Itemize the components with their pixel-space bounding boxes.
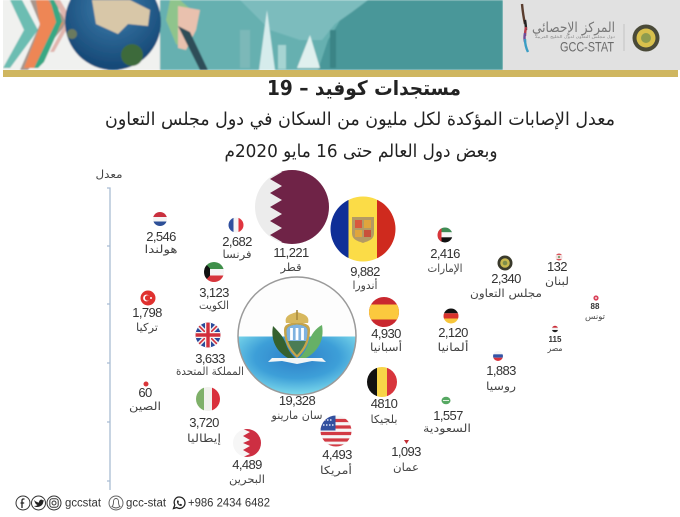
- emblem: crown: [286, 312, 308, 323]
- country: Tunisia: 88: [591, 302, 600, 311]
- flag: Saudi Arabia: [442, 397, 450, 404]
- footer social bar: [16, 496, 270, 510]
- country: UAE: 2,416: [430, 246, 460, 261]
- flag: Turkey: [140, 290, 156, 306]
- country: GCC: [470, 256, 542, 300]
- country: China: الصين: [129, 400, 161, 413]
- country: Egypt: مصر: [547, 344, 562, 353]
- country: Kuwait: 3,123: [199, 285, 229, 300]
- country: San Marino: سان مارينو: [270, 409, 322, 422]
- flag: USA: [320, 415, 352, 447]
- country: Spain: أسبانيا: [370, 340, 402, 354]
- country: UAE: [428, 227, 462, 275]
- country: Russia: 1,883: [486, 363, 516, 378]
- country: United Kingdom: المملكة المتحدة: [176, 365, 244, 378]
- country: Germany: ألمانيا: [438, 340, 468, 354]
- country: Andorra: أندورا: [352, 278, 378, 292]
- country: Qatar: قطر: [279, 261, 302, 274]
- emblem: laurel: [272, 326, 295, 360]
- country: Netherlands: [144, 212, 178, 256]
- country: Egypt: [547, 325, 562, 353]
- country: Oman: [391, 440, 421, 474]
- handle: gcc-stat: gcc-stat: [126, 498, 167, 510]
- flag: China: [144, 382, 148, 386]
- icon: facebook: [16, 496, 30, 510]
- country: Turkey: تركيا: [136, 321, 158, 334]
- country: Saudi Arabia: السعودية: [423, 422, 471, 435]
- country: Germany: [438, 308, 468, 354]
- emblem: shield: [284, 322, 310, 358]
- icon: twitter: [32, 496, 46, 510]
- logo arabic name: المركز الإحصائي: [532, 20, 615, 36]
- country: Bahrain: [229, 429, 265, 486]
- flag: France: [228, 218, 244, 232]
- flag: Qatar: [255, 170, 329, 244]
- country: Kuwait: الكويت: [199, 299, 229, 312]
- country: GCC: 2,340: [491, 271, 521, 286]
- logo panel: [503, 0, 680, 70]
- country: Lebanon: [546, 254, 568, 287]
- country: Andorra: 9,882: [350, 264, 380, 279]
- country: Tunisia: تونس: [585, 312, 605, 321]
- country: China: [129, 382, 161, 413]
- country: Turkey: 1,798: [132, 305, 162, 320]
- country: Italy: 3,720: [189, 415, 219, 430]
- flag: UAE: [438, 228, 452, 242]
- country: UAE: الإمارات: [428, 262, 462, 275]
- country: Spain: 4,930: [371, 326, 401, 341]
- flag: Germany: [444, 308, 458, 324]
- country: San Marino: 19,328: [279, 393, 315, 408]
- country: Oman: 1,093: [391, 444, 421, 459]
- country: United Kingdom: 3,633: [195, 351, 225, 366]
- country: San Marino: [238, 277, 356, 422]
- country: Bahrain: البحرين: [229, 473, 265, 486]
- country: Spain: [369, 297, 402, 354]
- country: Lebanon: 132: [547, 259, 567, 274]
- logo ribbon: [522, 4, 528, 52]
- icon: whatsapp: [174, 497, 185, 508]
- country: Kuwait: [199, 262, 229, 312]
- subtitle line 1: معدل الإصابات المؤكدة لكل مليون من السكان في دول مجلس التعاون: [105, 109, 615, 130]
- scale axis: [96, 168, 123, 490]
- icon: instagram: [47, 496, 61, 510]
- flag: United Kingdom: [195, 322, 221, 348]
- country: Saudi Arabia: 1,557: [433, 408, 463, 423]
- country: Tunisia: [585, 295, 605, 321]
- flag: Netherlands: [153, 212, 167, 226]
- country: France: 2,682: [222, 234, 252, 249]
- axis title: معدل: [96, 168, 123, 181]
- flag: Russia: [493, 351, 503, 361]
- country: Qatar: 11,221: [273, 245, 309, 260]
- banner artwork: [0, 0, 503, 70]
- country: Germany: 2,120: [438, 325, 468, 340]
- flag: Lebanon: [556, 254, 562, 260]
- country: France: فرنسا: [222, 248, 252, 261]
- country: Egypt: 115: [549, 335, 562, 344]
- flag: GCC: [498, 256, 512, 270]
- country: USA: أمريكا: [320, 463, 352, 477]
- country: Saudi Arabia: [423, 397, 471, 435]
- handle: gccstat: gccstat: [65, 498, 102, 510]
- country: Russia: روسيا: [486, 380, 516, 393]
- country: France: [222, 217, 252, 261]
- country: Lebanon: لبنان: [545, 275, 569, 288]
- flag: Spain: [369, 297, 399, 327]
- country: Belgium: 4810: [371, 396, 398, 411]
- title: مستجدات كوفيد – 19: [267, 76, 461, 100]
- country: United Kingdom: [176, 322, 244, 378]
- flag: Oman: [404, 440, 409, 444]
- country: Qatar: [255, 166, 332, 274]
- flag: Andorra: [330, 196, 396, 262]
- country: Oman: عمان: [393, 461, 419, 474]
- country: USA: 4,493: [322, 447, 352, 462]
- country: Belgium: بلجيكا: [370, 413, 398, 426]
- country: Andorra: [330, 196, 396, 292]
- flag: Bahrain: [233, 429, 261, 457]
- header banner: [0, 0, 680, 77]
- phone number: +986 2434 6482: [188, 498, 270, 510]
- flag: Belgium: [367, 367, 397, 397]
- logo arabic subtitle: دول مجلس التعاون لدول الخليج العربية: [535, 34, 615, 39]
- country: Italy: إيطاليا: [187, 432, 221, 445]
- flag: San Marino: [238, 277, 356, 396]
- country: Russia: [486, 350, 516, 393]
- icon: GCC emblem: [632, 24, 660, 52]
- country: USA: [320, 415, 352, 477]
- icon: snapchat: [109, 496, 123, 510]
- country: GCC: مجلس التعاون: [470, 287, 542, 300]
- gold band: [3, 70, 678, 77]
- country: Netherlands: 2,546: [146, 229, 176, 244]
- country: Netherlands: هولندا: [144, 243, 178, 256]
- country: Bahrain: 4,489: [232, 457, 262, 472]
- subtitle line 2: وبعض دول العالم حتى 16 مايو 2020م: [225, 141, 498, 162]
- country: China: 60: [138, 385, 152, 400]
- logo english name: GCC-STAT: [560, 38, 614, 54]
- emblem: ribbon: [268, 358, 326, 364]
- flag: Kuwait: [204, 262, 224, 282]
- country: Italy: [187, 387, 221, 445]
- flag: Tunisia: [593, 295, 599, 301]
- country: Turkey: [132, 290, 162, 334]
- country: Belgium: [367, 367, 398, 426]
- flag: Italy: [196, 387, 220, 411]
- flag: Egypt: [552, 326, 558, 332]
